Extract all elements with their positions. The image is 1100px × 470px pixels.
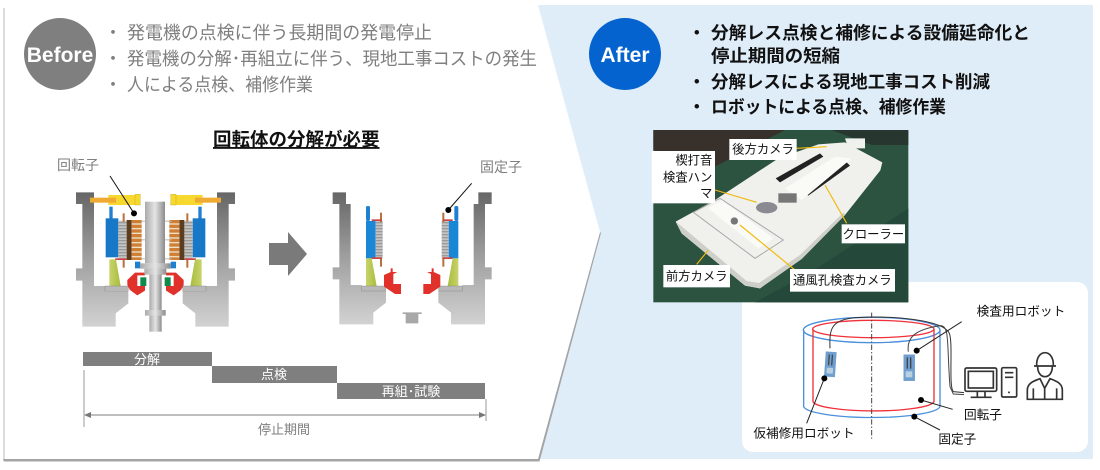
chart: outage timeline — [83, 352, 486, 437]
diagram: cylinder with robots, operator station — [753, 305, 1065, 446]
photo: inspection robot with callouts — [652, 130, 908, 302]
photo: inspection robot with callouts: 後方カメラ — [732, 141, 794, 156]
chart: outage timeline: 分解 — [134, 352, 160, 367]
text block: after bullets: 分解レスによる現地工事コスト削減 — [711, 72, 990, 92]
text block: before bullets: ・ — [104, 23, 122, 43]
panel: before arrow-shaped background — [3, 5, 601, 462]
badge: after — [589, 18, 661, 90]
photo: inspection robot with callouts: 前方カメラ — [666, 268, 727, 283]
computer — [965, 368, 1017, 397]
text block: after bullets: ・ — [688, 97, 706, 117]
label: stator: 固定子 — [480, 159, 522, 175]
photo: inspection robot with callouts: 検査ハン — [663, 171, 712, 185]
diagram: assembled generator — [76, 176, 235, 332]
panel: robot system diagram — [742, 282, 1088, 452]
photo: inspection robot with callouts: 通風孔検査カメラ — [793, 273, 892, 287]
text block: before bullets: 発電機の分解･再組立に伴う、現地工事コストの発生 — [127, 49, 537, 69]
labels: 仮補修用ロボット — [753, 426, 855, 440]
labels: 回転子 — [964, 408, 1002, 422]
text block: before bullets: 人による点検、補修作業 — [127, 75, 313, 95]
stator cylinder — [803, 317, 940, 418]
chart: outage timeline: 停止期間 — [258, 422, 310, 437]
operator icon — [1027, 353, 1062, 399]
photo: inspection robot with callouts: クローラー — [843, 227, 904, 241]
panel: after background — [530, 5, 1093, 459]
badge: before — [24, 18, 96, 90]
text block: before bullets: 発電機の点検に伴う長期間の発電停止 — [127, 23, 432, 43]
text block: after bullets: ロボットによる点検、補修作業 — [711, 97, 946, 117]
photo: inspection robot with callouts: 楔打音 — [675, 153, 712, 167]
text block: before bullets — [104, 23, 537, 95]
badge: before: Before — [27, 44, 93, 67]
leader lines — [807, 322, 962, 430]
labels — [753, 305, 1065, 446]
diagram: disassembled generator — [333, 183, 492, 324]
label: rotor: 回転子 — [57, 157, 99, 173]
heading: rotor disassembly required: 回転体の分解が必要 — [213, 129, 380, 150]
badge: after: After — [600, 44, 650, 67]
rotor cylinder — [813, 320, 934, 411]
labels: 検査用ロボット — [977, 305, 1065, 319]
text block: after bullets — [688, 23, 1030, 117]
robots — [824, 352, 836, 377]
text block: after bullets: 分解レス点検と補修による設備延命化と — [711, 23, 1030, 43]
chart: outage timeline: 再組･試験 — [382, 384, 440, 399]
arrow: disassembly step — [269, 232, 307, 276]
text block: before bullets: ・ — [104, 75, 122, 95]
cables — [830, 317, 964, 393]
text block: after bullets: ・ — [688, 72, 706, 92]
photo: inspection robot with callouts: マ — [700, 187, 712, 201]
chart: outage timeline: 点検 — [261, 367, 287, 382]
labels: 固定子 — [938, 432, 977, 446]
text block: after bullets: ・ — [688, 23, 706, 43]
text block: before bullets: ・ — [104, 49, 122, 69]
text block: after bullets: 停止期間の短縮 — [711, 46, 840, 66]
